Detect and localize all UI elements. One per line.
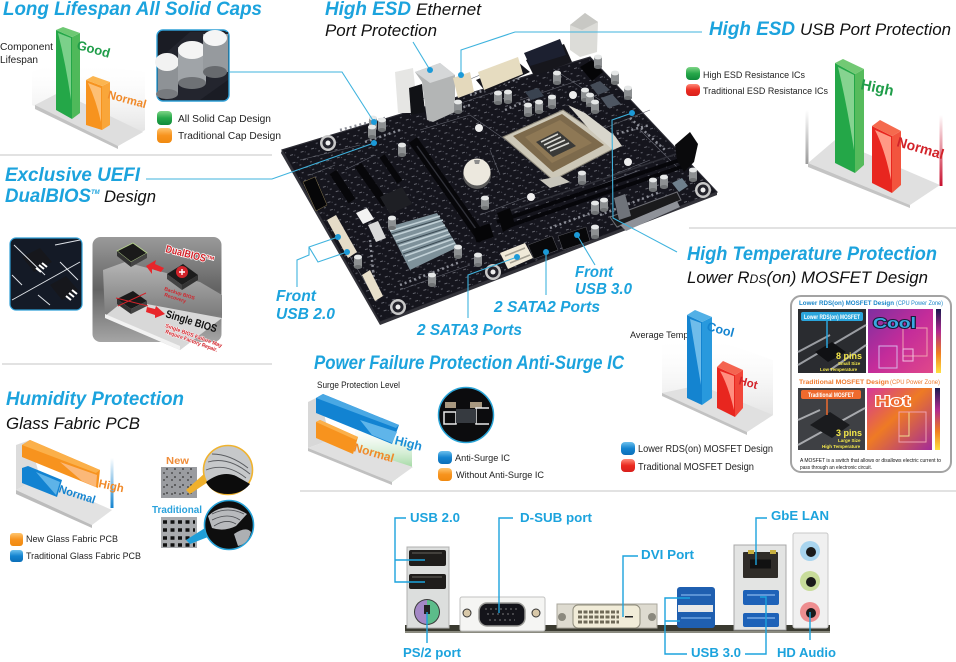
legend: glass fabric: New Glass Fabric PCB — [26, 534, 118, 544]
capacitors — [354, 55, 697, 287]
port labels: USB 3.0 — [691, 645, 741, 660]
heading: exclusive uefi dualbios — [5, 165, 156, 207]
legend: anti-surge: Anti-Surge IC — [455, 453, 510, 464]
board callout labels — [276, 264, 632, 339]
port labels: DVI Port — [641, 547, 695, 562]
port labels: GbE LAN — [771, 508, 829, 523]
panel: anti-surge — [308, 353, 624, 485]
diagram: dualbios vs single bios: Recovery — [163, 292, 187, 305]
board callout labels: USB 2.0 — [276, 306, 335, 323]
photo: anti-surge ic — [438, 388, 494, 442]
axis label: component lifespan — [0, 42, 53, 66]
pcb strip — [405, 625, 830, 633]
photo: solid capacitors — [155, 30, 229, 101]
audio jacks — [793, 533, 828, 628]
card row: traditional: Hot — [875, 393, 910, 410]
legend: cap designs: All Solid Cap Design — [178, 114, 271, 125]
heading: high temperature — [687, 244, 937, 287]
port labels: D-SUB port — [520, 510, 593, 525]
silkscreen traces — [300, 60, 680, 290]
bar chart: esd — [806, 59, 946, 208]
heading: high esd usb — [709, 19, 951, 40]
heading: high esd ethernet: Ethernet — [416, 1, 482, 19]
chart: glass fabric humidity: Normal — [57, 483, 97, 507]
bar chart: lifespan — [32, 27, 148, 149]
photo: bios chips on board — [10, 238, 82, 310]
bar chart: temperature: Hot — [737, 375, 759, 392]
heading: exclusive uefi dualbios: Design — [104, 188, 156, 206]
bar chart: esd: Normal — [895, 134, 946, 162]
heading: exclusive uefi dualbios: TM — [91, 190, 101, 196]
pcb — [282, 57, 717, 322]
chart: glass fabric humidity: High — [97, 478, 125, 495]
io ports on board — [395, 13, 598, 122]
legend: anti-surge: Without Anti-Surge IC — [456, 470, 544, 481]
card row: lower rds: (CPU Power Zone) — [896, 300, 943, 307]
heading: humidity protection — [6, 389, 184, 433]
heading: high esd usb: USB Port Protection — [800, 21, 951, 39]
diagram: new fabric weave — [161, 446, 252, 498]
board callout labels: Front — [575, 264, 614, 281]
mosfets — [525, 60, 688, 192]
heading: high esd usb: High ESD — [709, 19, 795, 40]
port labels: USB 2.0 — [410, 510, 460, 525]
legend: mosfet — [621, 442, 773, 473]
bar chart: temperature: Cool — [705, 319, 736, 340]
card row: traditional: 3 pins — [836, 428, 862, 438]
d-sub port — [460, 597, 545, 631]
card row: lower rds: Lower RDS(on) MOSFET — [804, 315, 860, 321]
card footnote: pass through an electronic circuit. — [800, 465, 872, 471]
legend: cap designs: Traditional Cap Design — [178, 131, 281, 142]
card row: lower rds: Small Size — [838, 361, 861, 366]
port labels — [403, 508, 836, 660]
card row: traditional — [798, 379, 940, 450]
motherboard — [281, 13, 717, 325]
callout lines and dots — [146, 32, 702, 318]
bar chart: lifespan: Good — [75, 37, 112, 61]
diagram: dualbios vs single bios: Single BIOS — [164, 308, 218, 335]
legend: esd: Traditional ESD Resistance ICs — [703, 86, 828, 96]
heading: high temperature: Lower RDS(on) MOSFET Design — [687, 269, 928, 287]
panel: high temperature protection — [621, 244, 951, 473]
board callout labels: USB 3.0 — [575, 281, 632, 298]
legend: mosfet: Traditional MOSFET Design — [638, 462, 754, 473]
panel: high esd usb — [686, 19, 951, 208]
legend: esd — [686, 67, 828, 96]
board callout labels: 2 SATA2 Ports — [493, 299, 600, 316]
legend: cap designs — [157, 111, 281, 143]
chipset and sticker — [356, 187, 412, 242]
card row: lower rds: Cool — [873, 315, 916, 332]
diagram: new fabric weave: New — [166, 455, 190, 467]
card row: traditional: Traditional MOSFET Design — [799, 379, 889, 386]
usb 2.0 and ps/2 stack — [407, 547, 449, 628]
socket — [503, 105, 622, 188]
sata black ports — [528, 227, 590, 259]
legend: esd: High ESD Resistance ICs — [703, 70, 805, 80]
diagram: dualbios vs single bios — [92, 237, 224, 354]
card row: lower rds: 8 pins — [836, 351, 862, 361]
card row: traditional: Large Size — [838, 438, 861, 443]
diagram: dualbios vs single bios: Require Factory Repair. — [164, 329, 218, 354]
panel: long lifespan solid caps — [0, 0, 281, 149]
silkscreen texture — [284, 59, 715, 320]
pcie slots — [333, 140, 494, 242]
card row: traditional: High Temperature — [822, 444, 861, 449]
mosfet comparison card — [791, 296, 951, 472]
heading: anti-surge: Power Failure Protection Anti-Surge IC — [314, 353, 624, 374]
diagram: dualbios vs single bios: Backup BIOS — [163, 286, 196, 302]
chart: glass fabric humidity — [16, 440, 125, 528]
legend: glass fabric: Traditional Glass Fabric PCB — [26, 551, 141, 561]
panel: rear io ports — [395, 508, 836, 660]
card row: traditional: (CPU Power Zone) — [890, 379, 940, 386]
card footnote: A MOSFET is a switch that allows or disallows electric current to — [800, 458, 941, 464]
diagram: dualbios vs single bios: DualBIOS™ — [164, 243, 216, 267]
heading: high esd ethernet — [325, 0, 482, 40]
heatsink — [388, 213, 458, 270]
diagram: traditional fabric weave: Traditional — [152, 504, 202, 516]
heading: humidity protection: Humidity Protection — [6, 389, 184, 410]
port labels: HD Audio — [777, 645, 836, 660]
diagram: traditional fabric weave — [152, 500, 254, 550]
card row: lower rds — [798, 300, 943, 373]
axis label: component lifespan: Lifespan — [0, 55, 38, 66]
bar chart: temperature — [662, 310, 773, 435]
board callout labels: 2 SATA3 Ports — [416, 322, 522, 339]
heading: high esd ethernet: Port Protection — [325, 22, 437, 40]
bar chart: lifespan: Normal — [106, 89, 148, 111]
panel: humidity protection — [6, 389, 254, 562]
card row: lower rds: Lower RDS(on) MOSFET Design — [799, 300, 894, 307]
panel: dualbios — [5, 165, 224, 354]
heading: exclusive uefi dualbios: Exclusive UEFI — [5, 165, 141, 186]
memory slots — [495, 154, 684, 232]
card row: lower rds: Low Temperature — [820, 367, 858, 372]
pin header — [303, 177, 327, 211]
board callout labels: Front — [276, 288, 317, 305]
axis label: component lifespan: Component — [0, 42, 53, 53]
atx connector — [610, 192, 681, 231]
heading: high temperature: High Temperature Protection — [687, 244, 937, 265]
divider lines — [0, 155, 956, 491]
bar chart: esd: High — [859, 76, 895, 100]
axis label: surge level: Surge Protection Level — [317, 380, 400, 390]
usb 3.0 double port — [677, 587, 715, 628]
dvi port — [557, 604, 657, 628]
diagram: dualbios vs single bios: Single BIOS Failure May — [164, 323, 224, 350]
chart: surge protection: Normal — [352, 440, 396, 465]
heading: exclusive uefi dualbios: DualBIOS — [5, 186, 91, 207]
white connectors — [327, 215, 533, 301]
axis label: average temp: Average Temp. — [630, 330, 691, 341]
battery — [463, 158, 491, 189]
chart: surge protection: High — [393, 433, 424, 454]
card footnote — [800, 458, 941, 471]
legend: glass fabric — [10, 533, 141, 562]
port leader lines — [395, 518, 810, 654]
mounting holes — [320, 91, 711, 315]
lan and usb 3.0 stack — [734, 545, 786, 630]
port labels: PS/2 port — [403, 645, 462, 660]
card row: traditional: Traditional MOSFET — [808, 393, 854, 399]
chart: surge protection — [308, 394, 424, 485]
legend: mosfet: Lower RDS(on) MOSFET Design — [638, 444, 773, 455]
legend: anti-surge — [438, 451, 544, 481]
heading: humidity protection: Glass Fabric PCB — [6, 415, 140, 433]
black right connector — [675, 132, 698, 172]
